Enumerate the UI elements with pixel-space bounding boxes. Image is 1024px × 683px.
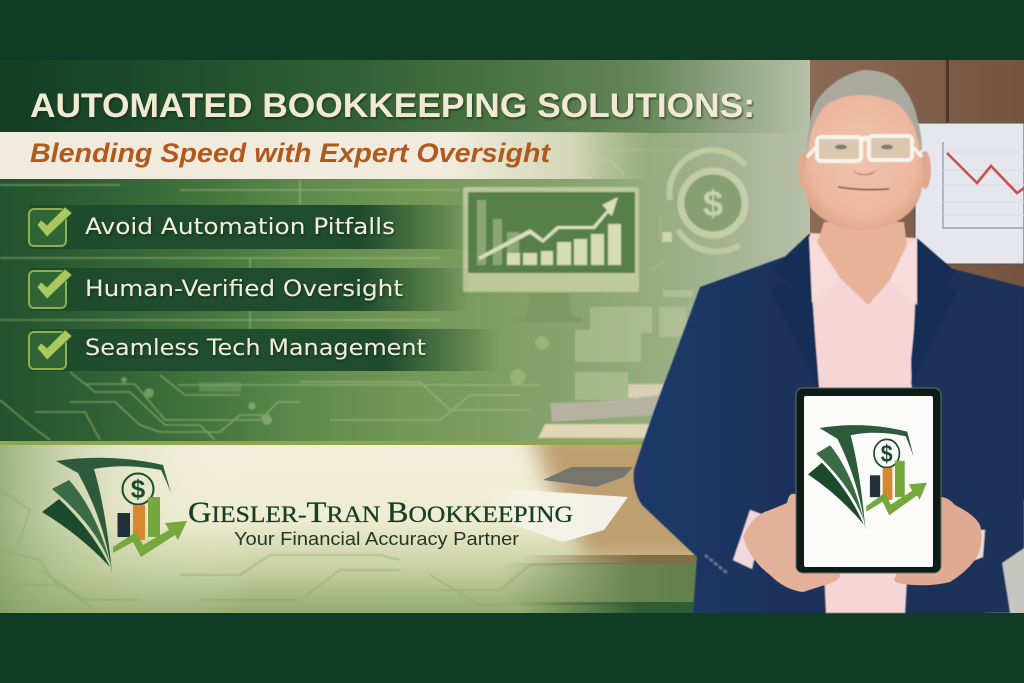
subtitle text: Blending Speed with Expert Oversight bbox=[30, 138, 551, 168]
company logo: $ bbox=[131, 474, 146, 504]
tablet bbox=[796, 388, 941, 573]
desk papers bbox=[478, 487, 628, 542]
ears bbox=[798, 151, 810, 189]
left shirt collar bbox=[809, 236, 840, 303]
top band bbox=[0, 0, 1024, 60]
desk tablet bbox=[543, 467, 633, 487]
icon: checkbox bbox=[29, 330, 72, 369]
bright bars bbox=[507, 224, 621, 265]
background: monitor with rising chart bbox=[463, 187, 639, 322]
chart arrow bbox=[478, 197, 618, 260]
logo banner backdrop bbox=[0, 445, 720, 613]
company tagline: Your Financial Accuracy Partner bbox=[234, 529, 519, 549]
company name: GIESLER- TRAN BOOKKEEPING bbox=[188, 496, 573, 529]
bottom band bbox=[0, 613, 1024, 683]
nose bbox=[852, 170, 877, 175]
tablet screen bbox=[804, 396, 933, 567]
face bbox=[804, 95, 923, 230]
checklist item: Human-Verified Oversight bbox=[29, 268, 470, 311]
background: data panels bbox=[575, 290, 693, 400]
banner circuit traces bbox=[0, 490, 640, 610]
jacket bbox=[634, 233, 1024, 613]
lower right backdrop bbox=[985, 500, 1024, 613]
eyes bbox=[835, 144, 893, 150]
person: portrait bbox=[634, 70, 1024, 613]
neck bbox=[817, 222, 907, 305]
tablet logo bbox=[808, 425, 927, 530]
background: desk books bbox=[538, 384, 670, 438]
left cuff bbox=[733, 510, 764, 569]
subtitle band bbox=[0, 132, 650, 179]
icon: checkbox bbox=[29, 207, 72, 246]
shirt bbox=[809, 233, 922, 613]
right lapel bbox=[911, 238, 957, 385]
background: circuit traces bbox=[0, 150, 690, 440]
background: green technology panel bbox=[0, 60, 830, 445]
monitor stand bbox=[513, 293, 582, 322]
title: AUTOMATED BOOKKEEPING SOLUTIONS: bbox=[30, 87, 755, 125]
dollar sign: $ bbox=[703, 183, 723, 224]
checklist item: Seamless Tech Management bbox=[29, 329, 500, 371]
background: dollar gear emblem bbox=[662, 150, 745, 252]
right cuff bbox=[967, 530, 985, 563]
glasses bbox=[807, 136, 922, 161]
left hand bbox=[743, 494, 840, 592]
jacket sleeve buttons bbox=[705, 555, 727, 573]
faded bars bbox=[477, 200, 519, 265]
background: wood wall bbox=[810, 60, 1024, 290]
company logo bbox=[42, 458, 187, 573]
item label: Human-Verified Oversight bbox=[85, 276, 403, 302]
tablet logo: $ bbox=[881, 441, 893, 467]
banner divider line bbox=[0, 441, 690, 445]
hair bbox=[807, 70, 922, 150]
right shirt collar bbox=[890, 238, 917, 305]
icon: checkbox bbox=[29, 269, 72, 308]
checklist item: Avoid Automation Pitfalls bbox=[29, 205, 470, 249]
desk surface bbox=[511, 445, 720, 613]
right hand bbox=[894, 497, 982, 585]
mouth bbox=[838, 187, 889, 190]
item label: Seamless Tech Management bbox=[85, 335, 426, 361]
wall screen with chart bbox=[915, 123, 1024, 264]
red trend line bbox=[947, 153, 1024, 193]
left lapel bbox=[770, 233, 817, 385]
item label: Avoid Automation Pitfalls bbox=[85, 214, 395, 240]
